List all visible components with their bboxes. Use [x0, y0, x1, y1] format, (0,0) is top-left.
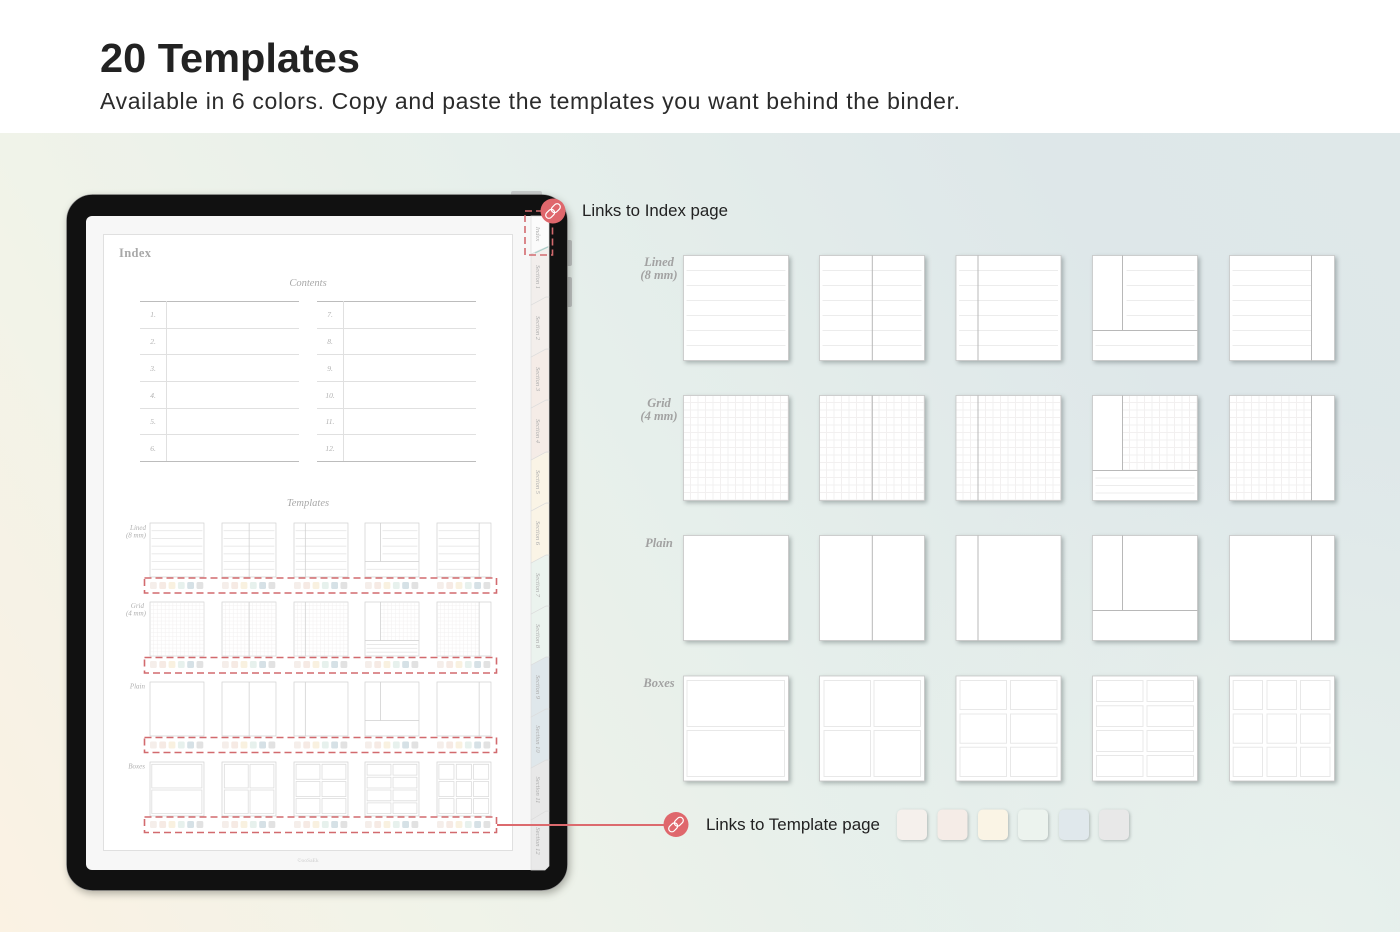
small row: lined: (8 mm)	[126, 532, 147, 540]
tab labels: Section 3	[534, 367, 541, 392]
tablet top button	[511, 191, 542, 197]
contents table: 12.	[325, 444, 335, 453]
contents table: 1.	[150, 310, 156, 319]
small row: lined: Lined	[129, 524, 146, 532]
color swatches	[897, 810, 1129, 840]
tab labels	[534, 226, 541, 855]
icon: link to template	[664, 812, 688, 837]
dashed highlight: lined links	[144, 578, 496, 593]
tab labels: Section 2	[534, 316, 541, 341]
contents heading: Contents	[289, 278, 327, 289]
title: 20 Templates	[100, 35, 360, 81]
contents table: 4.	[150, 391, 156, 400]
small row: grid: (4 mm)	[126, 610, 147, 618]
tablet side buttons	[566, 240, 572, 307]
subtitle: Available in 6 colors. Copy and paste the templates you want behind the binder.	[100, 88, 960, 114]
dashed highlight: boxes links	[144, 817, 496, 832]
tab labels: Section 5	[534, 470, 541, 495]
small row: lined	[126, 523, 491, 589]
row label: boxes: Boxes	[642, 676, 675, 690]
contents table: 6.	[150, 444, 156, 453]
tab labels: Section 10	[534, 725, 541, 753]
tab labels: Section 7	[534, 573, 541, 598]
row label: grid	[640, 396, 678, 423]
contents table: 2.	[150, 337, 156, 346]
footer credit: ©ooSaEk	[297, 857, 319, 864]
row label: plain: Plain	[645, 536, 673, 550]
small row: grid: Grid	[131, 602, 144, 610]
template row: boxes	[684, 676, 1334, 781]
dashed highlight: grid links	[144, 658, 496, 673]
tab labels: Section 9	[534, 675, 541, 700]
small row: plain	[129, 682, 491, 748]
small row: boxes: Boxes	[128, 762, 145, 770]
small row: plain: Plain	[129, 682, 145, 690]
tab labels: Section 4	[534, 419, 541, 444]
tab labels: Index	[534, 226, 541, 241]
tab labels: Section 1	[534, 265, 541, 289]
dashed highlight: index tab	[525, 211, 552, 255]
index page sheet	[104, 234, 512, 850]
label: links to index page: Links to Index page	[582, 202, 728, 220]
tab labels: Section 8	[534, 624, 541, 649]
label: links to template page: Links to Template page	[706, 816, 880, 834]
template row: grid	[684, 396, 1334, 500]
small row: grid	[126, 602, 491, 668]
templates heading: Templates	[287, 498, 329, 509]
row label: lined: Lined	[643, 255, 675, 269]
template row: plain	[684, 536, 1334, 640]
template row: lined	[684, 256, 1334, 360]
tab labels: Section 6	[534, 521, 541, 546]
contents table: 3.	[149, 364, 156, 373]
row label: grid: (4 mm)	[640, 409, 678, 423]
connector line to template links	[497, 824, 666, 826]
row label: lined	[640, 255, 678, 282]
contents table: 10.	[325, 391, 335, 400]
contents table	[140, 301, 476, 462]
tablet screen	[86, 216, 549, 870]
contents table: 7.	[327, 310, 333, 319]
small row: boxes	[128, 762, 491, 828]
section tabs	[531, 216, 549, 870]
tablet body	[66, 194, 568, 890]
contents table: 9.	[327, 364, 333, 373]
index heading: Index	[119, 246, 152, 260]
tab labels: Section 11	[534, 777, 541, 803]
dashed highlight: plain links	[144, 738, 496, 752]
tab labels: Section 12	[534, 827, 541, 855]
icon: link to index	[540, 198, 566, 224]
contents table: 11.	[326, 417, 335, 426]
contents table: 5.	[150, 417, 156, 426]
row label: grid: Grid	[647, 396, 672, 410]
contents table: 8.	[327, 337, 333, 346]
row label: lined: (8 mm)	[640, 268, 678, 282]
tablet device	[66, 191, 572, 890]
